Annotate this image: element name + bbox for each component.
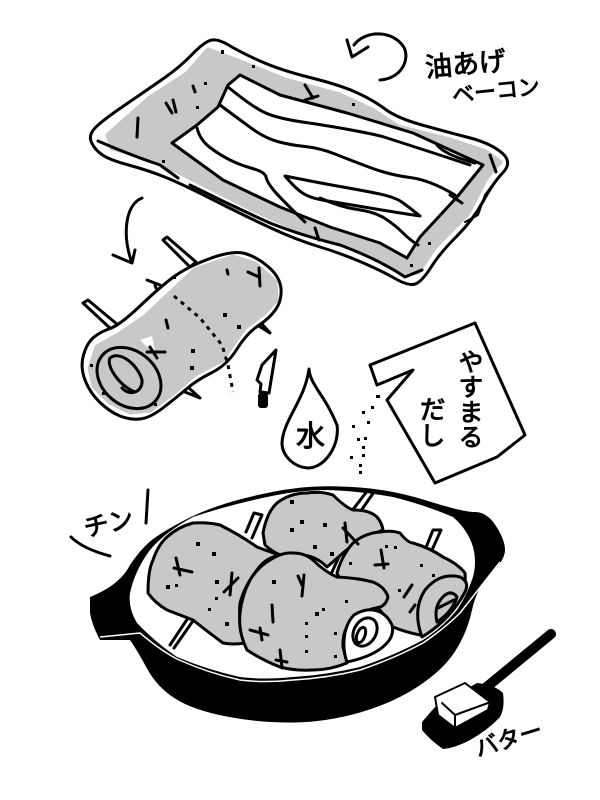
roll outer <box>82 252 281 419</box>
toothpicks in skillet <box>170 490 441 648</box>
arrow: flip tray <box>347 34 406 80</box>
bacon sheet <box>172 75 483 258</box>
roll gray <box>90 257 276 412</box>
toothpicks <box>83 237 270 398</box>
spatula blade <box>422 683 504 749</box>
spiral ends <box>85 335 173 421</box>
label: dashi brand: やすまる <box>455 349 483 449</box>
roll end: front <box>344 610 393 662</box>
panel: dashi carton <box>370 323 525 483</box>
panel: fried tofu tray with bacon <box>90 40 508 285</box>
label: fried tofu bacon <box>424 46 541 108</box>
icon: water drop <box>282 369 337 468</box>
label: water: 水 <box>296 420 325 453</box>
panel: skillet with rolls <box>90 486 505 723</box>
panel: butter on spatula <box>422 634 551 749</box>
tray outer outline <box>90 40 508 285</box>
arrow: roll down <box>113 198 142 263</box>
icon: knife <box>257 350 276 408</box>
label: butter: バター <box>472 717 545 762</box>
label: microwave: チン <box>81 505 136 543</box>
panel: bacon roll with toothpicks <box>82 237 281 421</box>
panel: dashi carton: だし <box>416 396 446 448</box>
label: fried tofu bacon: 油あげ <box>424 46 507 83</box>
tray edge inner strokes <box>98 141 178 178</box>
butter <box>435 683 490 728</box>
label: fried tofu bacon: ベーコン <box>451 74 541 108</box>
roll specks <box>90 268 260 406</box>
label: microwave <box>71 490 148 556</box>
skillet white interior <box>130 490 475 678</box>
rim highlight <box>100 562 500 682</box>
roll: right <box>337 531 465 635</box>
dotted cut line <box>174 296 233 392</box>
skillet roll specks <box>166 500 435 668</box>
roll: left <box>148 523 280 644</box>
tray gray surface <box>108 50 500 274</box>
spatula handle <box>483 634 551 690</box>
skillet black body <box>90 486 505 723</box>
roll: front <box>240 553 388 670</box>
roll: back <box>263 492 383 567</box>
roll end: right <box>418 576 467 637</box>
tray specks <box>137 50 496 267</box>
dashi droplets <box>350 395 380 474</box>
